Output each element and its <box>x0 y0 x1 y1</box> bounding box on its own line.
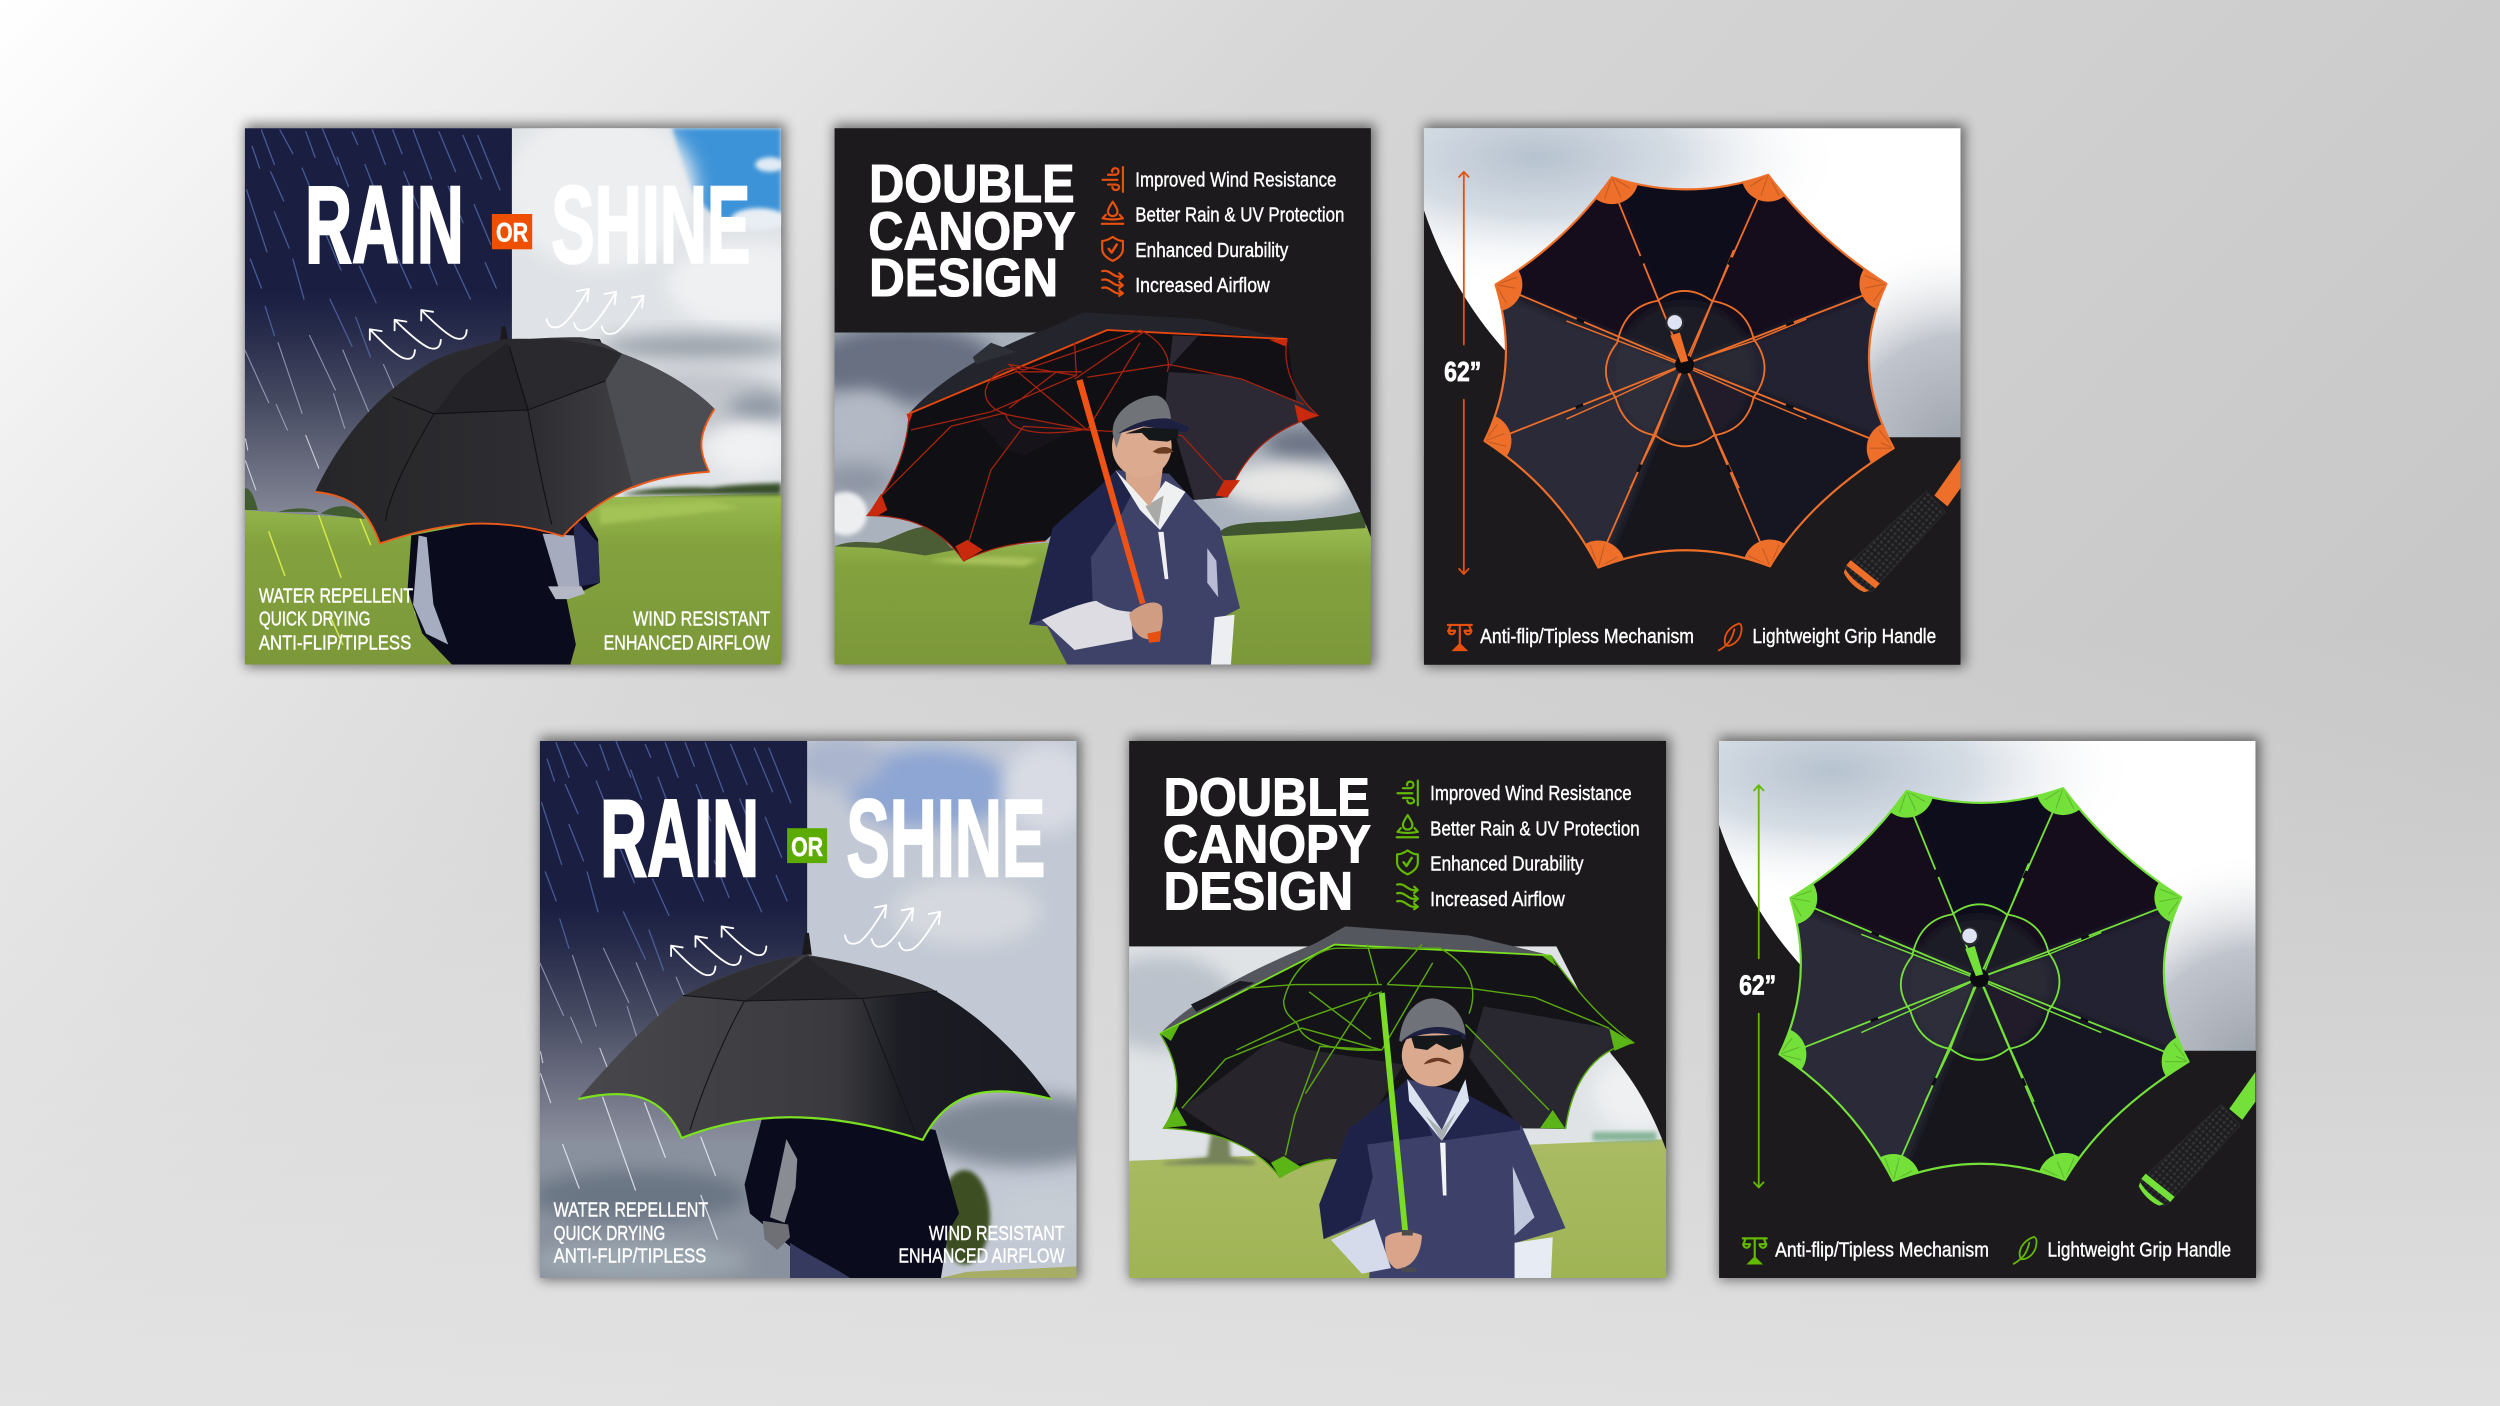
yellow rain on grass <box>269 515 422 645</box>
headline: CANOPY <box>868 201 1076 261</box>
right feature list <box>604 611 770 650</box>
left feature list: QUICK DRYING <box>259 608 371 631</box>
open umbrella from below with grip <box>1458 148 1961 594</box>
label: anti-flip: Anti-flip/Tipless Mechanism <box>1775 1239 1989 1262</box>
label: grip: Lightweight Grip Handle <box>1753 625 1936 648</box>
left feature list <box>554 1199 708 1268</box>
man from behind <box>408 515 600 665</box>
sky and clouds <box>809 325 1371 551</box>
left feature list <box>258 588 413 650</box>
umbrella back view <box>578 933 1052 1140</box>
headline <box>868 154 1076 308</box>
benefit list: Increased Airflow <box>1135 274 1271 297</box>
left feature list: WATER REPELLENT <box>259 585 413 608</box>
umbrella back view <box>315 326 715 543</box>
badge: OR: OR <box>496 217 528 248</box>
panel: rain or shine (orange) <box>244 128 782 664</box>
bright overcast sky <box>1091 946 1680 1172</box>
benefit list <box>1430 782 1640 911</box>
dimension label: 62” <box>1444 356 1481 387</box>
left feature list: QUICK DRYING <box>554 1222 665 1245</box>
label: grip: Lightweight Grip Handle <box>2047 1239 2231 1262</box>
headline: DOUBLE <box>869 154 1075 214</box>
panel: double canopy (orange) <box>809 128 1371 665</box>
stormy left sky <box>530 741 807 1279</box>
hand on grip <box>1129 603 1163 643</box>
benefit list: Better Rain & UV Protection <box>1135 204 1344 227</box>
right feature list <box>898 1222 1065 1268</box>
umbrella underside <box>867 313 1318 561</box>
light gradient backdrop <box>1719 741 2255 1068</box>
benefit list: Increased Airflow <box>1430 888 1566 911</box>
open umbrella from below with grip <box>1753 761 2255 1208</box>
dimension label: 62” <box>1739 969 1776 1000</box>
umbrella underside <box>1160 926 1633 1177</box>
overcast right sky <box>795 737 1123 1278</box>
umbrella shaft <box>1379 993 1408 1230</box>
dark header block with curved edge <box>835 128 1371 537</box>
panel: rain or shine (green) <box>530 737 1123 1279</box>
grass field <box>245 483 781 665</box>
arrows <box>671 905 940 975</box>
hand on grip <box>1385 1230 1422 1272</box>
heading: RAIN: RAIN <box>600 778 759 900</box>
right feature list: WIND RESISTANT <box>633 608 770 631</box>
arrows <box>370 289 644 359</box>
left half stormy sky <box>245 128 512 528</box>
right feature list: WIND RESISTANT <box>929 1222 1065 1245</box>
green rim and tips <box>1160 945 1551 1034</box>
icon: feather <box>1719 623 1742 650</box>
headline: DESIGN <box>1164 862 1353 922</box>
man in navy jacket <box>1319 998 1565 1278</box>
62 inch dimension arrow <box>1459 172 1469 574</box>
heading: SHINE: SHINE <box>551 164 750 286</box>
benefit list: Improved Wind Resistance <box>1135 168 1336 191</box>
orange rim and tips <box>909 330 1287 414</box>
benefit list: Improved Wind Resistance <box>1430 782 1632 805</box>
dark backdrop shape <box>1424 210 1961 665</box>
right feature list: ENHANCED AIRFLOW <box>604 631 770 654</box>
heading: RAIN: RAIN <box>305 164 464 286</box>
panel: double canopy (green) <box>1091 741 1680 1278</box>
benefit list: Better Rain & UV Protection <box>1430 817 1640 840</box>
label: anti-flip: Anti-flip/Tipless Mechanism <box>1480 625 1694 648</box>
umbrella shaft <box>1076 379 1145 605</box>
light gradient backdrop <box>1424 128 1961 455</box>
blurred grass and horizon <box>1129 1132 1666 1278</box>
icon: feather <box>2014 1237 2037 1264</box>
dark backdrop shape <box>1719 824 2256 1279</box>
headline: DESIGN <box>869 248 1058 308</box>
headline <box>1163 767 1371 922</box>
man from behind <box>745 1115 959 1278</box>
panel: top view (green) <box>1719 741 2256 1279</box>
benefit list: Enhanced Durability <box>1135 239 1289 262</box>
right feature list: ENHANCED AIRFLOW <box>898 1245 1065 1268</box>
man in navy jacket <box>1029 395 1240 665</box>
right half sunny sky <box>512 128 782 497</box>
grass and tree line <box>835 510 1371 665</box>
benefit list <box>1135 168 1344 297</box>
rain streaks <box>245 129 500 490</box>
panel: top view (orange) <box>1424 128 1961 665</box>
distant tree and grass <box>939 1170 1077 1278</box>
headline: DOUBLE <box>1164 767 1370 827</box>
62 inch dimension arrow <box>1754 785 1763 1187</box>
benefit icons <box>1102 167 1123 296</box>
benefit list: Enhanced Durability <box>1430 853 1584 876</box>
rain streaks <box>540 742 791 1239</box>
left feature list: ANTI-FLIP/TIPLESS <box>259 631 411 654</box>
left feature list: ANTI-FLIP/TIPLESS <box>554 1245 706 1268</box>
left feature list: WATER REPELLENT <box>554 1199 708 1222</box>
benefit icons <box>1397 781 1418 909</box>
icon: scale <box>1743 1238 1767 1265</box>
icon: scale <box>1448 625 1472 651</box>
headline: CANOPY <box>1163 815 1371 875</box>
heading: SHINE: SHINE <box>846 778 1045 900</box>
badge: OR: OR <box>791 832 823 862</box>
panel shadows <box>245 124 2260 1280</box>
dark header block with curved edge <box>1129 741 1666 1150</box>
